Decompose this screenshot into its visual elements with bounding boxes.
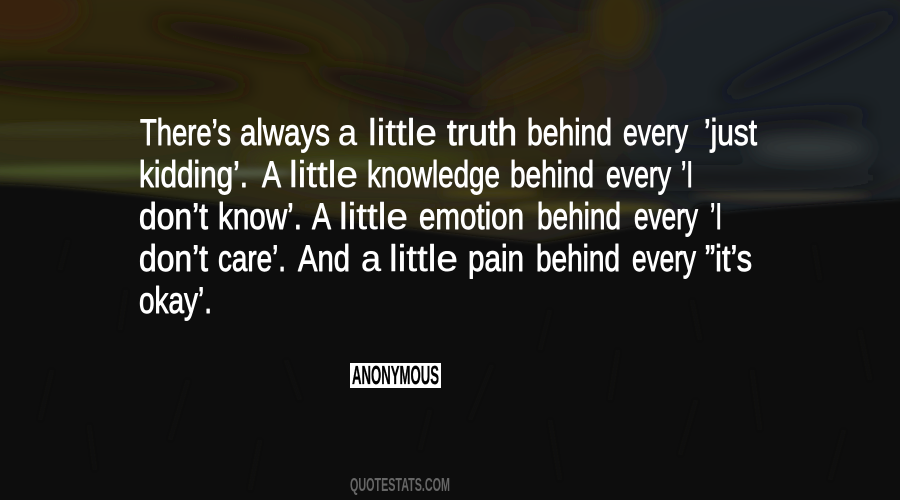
- quote line 2: [139, 154, 693, 195]
- author badge: ANONYMOUS: [350, 360, 441, 390]
- quote line 3: [139, 196, 722, 237]
- quote line 2: kidding’.: [139, 154, 248, 195]
- quote line 1: ’just: [704, 112, 758, 153]
- author badge: ANONYMOUS: ANONYMOUS: [352, 360, 439, 390]
- quote line 4: pain: [468, 238, 524, 279]
- quote line 3: ’I: [710, 196, 722, 237]
- quote line 4: [139, 238, 752, 279]
- quote line 4: a: [361, 238, 381, 279]
- quote line 4: ”it’s: [705, 238, 752, 279]
- quote line 1: a: [338, 112, 357, 153]
- quote line 2: A: [262, 154, 281, 195]
- quote line 3: know’.: [218, 196, 302, 237]
- quote line 4: And: [298, 238, 350, 279]
- quote line 2: behind: [510, 154, 594, 195]
- quote line 4: little: [389, 238, 458, 279]
- quote line 1: truth: [447, 112, 517, 153]
- quote line 1: every: [623, 112, 688, 153]
- quote line 1: behind: [527, 112, 612, 153]
- quote line 4: don’t: [139, 238, 209, 279]
- quote line 1: always: [240, 112, 330, 153]
- quote line 2: knowledge: [367, 154, 500, 195]
- quote line 1: little: [368, 112, 437, 153]
- quote line 3: don’t: [139, 196, 209, 237]
- quote line 5: okay’.: [139, 280, 212, 321]
- quote line 2: little: [289, 154, 358, 195]
- quote line 4: care’.: [218, 238, 286, 279]
- quote line 3: every: [634, 196, 698, 237]
- quote line 3: emotion: [419, 196, 524, 237]
- quote line 4: every: [632, 238, 696, 279]
- quote line 3: A: [312, 196, 331, 237]
- quote line 3: little: [339, 196, 408, 237]
- grass texture: [40, 240, 870, 490]
- quote line 1: There’s: [140, 112, 231, 153]
- quote line 2: every: [606, 154, 671, 195]
- watermark: QUOTESTATS.COM: QUOTESTATS.COM: [350, 475, 450, 495]
- ground hill silhouette: [0, 183, 900, 500]
- quote line 3: behind: [537, 196, 621, 237]
- quote line 1: [140, 112, 758, 153]
- quote line 2: ’I: [681, 154, 693, 195]
- quote line 4: behind: [536, 238, 620, 279]
